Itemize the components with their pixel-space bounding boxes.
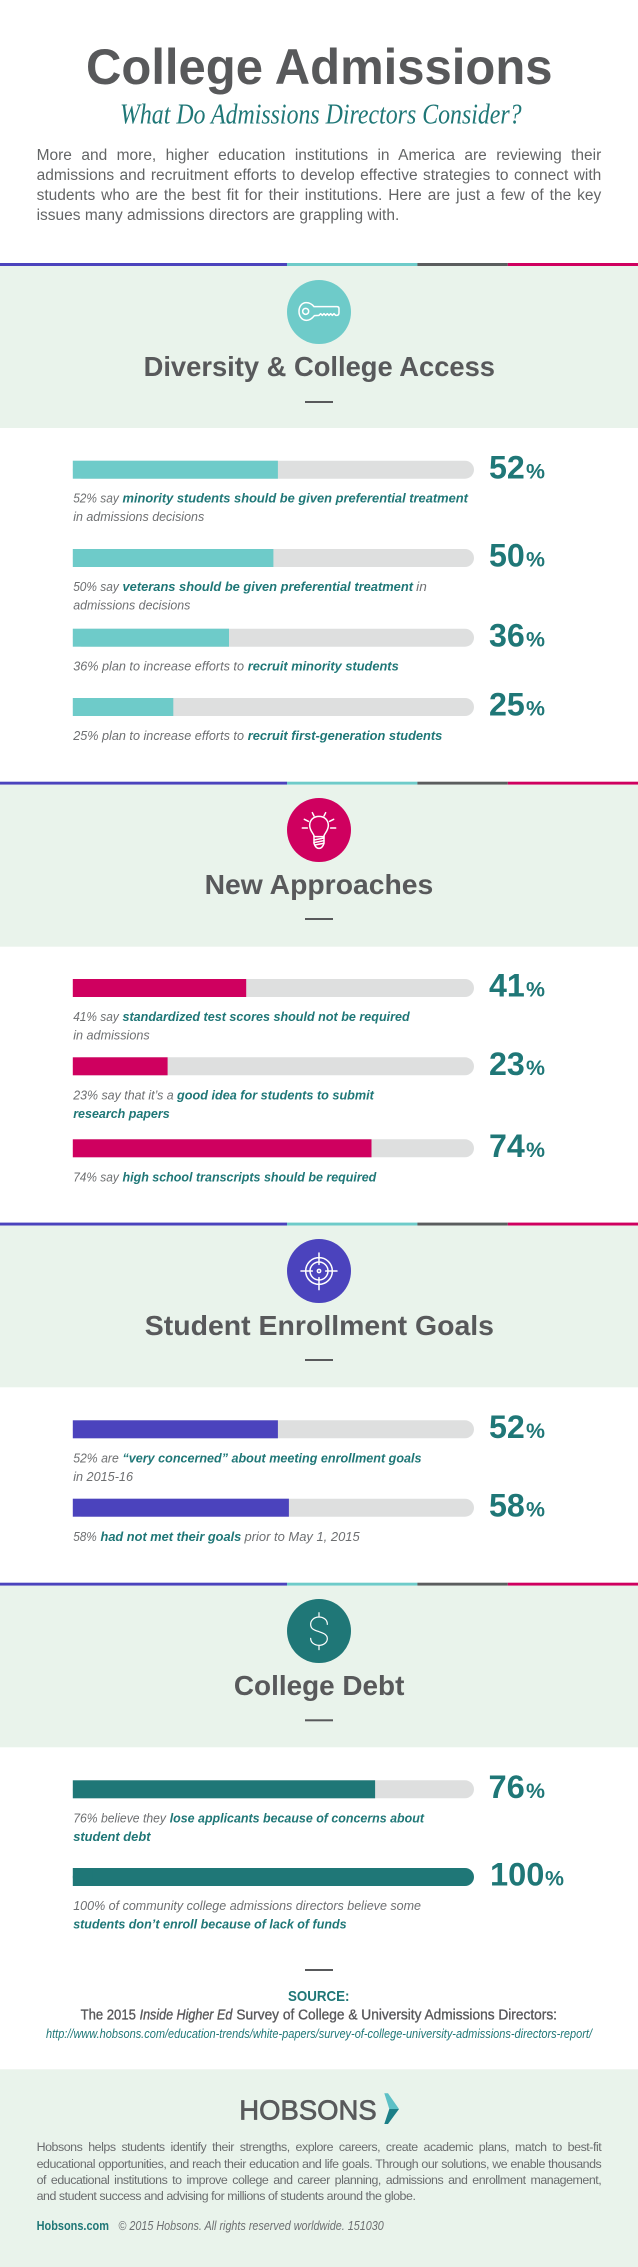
bar 50% veterans: admissions decisions xyxy=(73,597,191,612)
intro paragraph xyxy=(37,147,602,224)
bar 25% first-generation students: recruit first-generation students xyxy=(248,728,442,743)
footer links xyxy=(37,2218,384,2233)
bar 50% veterans: 50 xyxy=(489,537,525,573)
icon: key xyxy=(287,280,351,344)
bar 76% lose applicants: lose applicants because of concerns about xyxy=(170,1811,425,1826)
bar 52% very concerned xyxy=(73,1409,545,1484)
bar 36% recruit minority students xyxy=(73,617,545,674)
bar 23% research papers: 23 xyxy=(489,1046,525,1082)
stats: Student Enrollment Goals xyxy=(73,1409,545,1544)
bar 41% test scores xyxy=(73,968,545,1042)
bar 52% very concerned: % xyxy=(526,1420,545,1443)
bar 50% veterans: 50% say xyxy=(73,579,120,594)
panel: Student Enrollment Goals xyxy=(0,1226,638,1387)
bar 76% lose applicants: student debt xyxy=(73,1829,151,1844)
footer paragraph xyxy=(37,2140,602,2203)
icon: target xyxy=(287,1239,351,1303)
footer links: Hobsons.com xyxy=(37,2218,109,2233)
heading: Student Enrollment Goals xyxy=(145,1310,494,1341)
panel: Diversity & College Access xyxy=(0,266,638,428)
bar 100% lack of funds xyxy=(73,1857,564,1931)
source credit: SOURCE: xyxy=(288,1988,350,2005)
bar 41% test scores: 41% say xyxy=(73,1009,120,1024)
intro paragraph: issues many admissions directors are grappling with. xyxy=(37,207,399,224)
bar 52% very concerned: 52 xyxy=(489,1409,525,1445)
bar 52% very concerned: “very concerned” about meeting enrollment goals xyxy=(122,1451,422,1466)
bar 76% lose applicants xyxy=(73,1769,545,1844)
logo: Hobsons: HOBSONS xyxy=(239,2094,377,2125)
bar 52% minority students: 52 xyxy=(489,449,525,485)
intro paragraph: students who are the best fit for their institutions. Here are just a few of the key xyxy=(37,187,601,204)
bar 52% minority students: in admissions decisions xyxy=(73,509,205,524)
bar 41% test scores: in admissions xyxy=(73,1027,150,1042)
bar 58% goals not met: % xyxy=(526,1498,545,1521)
icon: light bulb xyxy=(287,798,351,862)
bar 52% minority students: minority students should be given preferential treatment xyxy=(122,491,469,506)
stats: College Debt xyxy=(73,1769,564,1931)
bar 52% minority students xyxy=(73,449,545,524)
footer paragraph: Hobsons helps students identify their strengths, explore careers, create academic plans, match to best-fit xyxy=(37,2140,601,2154)
bar 25% first-generation students: 25 xyxy=(489,687,525,723)
footer paragraph: and student success and advising for millions of students around the globe. xyxy=(37,2189,415,2203)
subtitle: What Do Admissions Directors Consider? xyxy=(120,98,522,130)
bar 74% transcripts xyxy=(73,1128,545,1185)
bar 25% first-generation students: % xyxy=(526,698,545,721)
bar 52% minority students: 52% say xyxy=(73,491,120,506)
footer paragraph: of educational institutions to improve college and career planning, admissions and enrollment management, xyxy=(37,2173,601,2187)
bar 50% veterans: veterans should be given preferential treatment xyxy=(122,579,414,594)
source credit: Survey of College & University Admissions Directors: xyxy=(236,2007,557,2023)
bar 58% goals not met: prior to May 1, 2015 xyxy=(244,1529,360,1544)
footer panel xyxy=(0,2069,638,2267)
bar 36% recruit minority students: % xyxy=(526,628,545,651)
source credit xyxy=(46,1988,593,2041)
bar 41% test scores: standardized test scores should not be required xyxy=(122,1009,411,1024)
bar 100% lack of funds: 100 xyxy=(490,1857,544,1893)
bar 50% veterans: in xyxy=(416,579,427,594)
bar 100% lack of funds: % xyxy=(545,1868,564,1891)
bar 76% lose applicants: 76 xyxy=(488,1769,525,1805)
bar 23% research papers: 23% say that it’s a xyxy=(72,1088,174,1103)
bar 58% goals not met: had not met their goals xyxy=(100,1529,241,1544)
source credit: The 2015 xyxy=(81,2007,136,2023)
bar 52% minority students: % xyxy=(526,460,545,483)
bar 23% research papers xyxy=(72,1046,545,1121)
heading: New Approaches xyxy=(205,869,433,900)
panel: New Approaches xyxy=(0,785,638,947)
bar 74% transcripts: high school transcripts should be required xyxy=(122,1170,377,1185)
source credit: Inside Higher Ed xyxy=(140,2007,233,2023)
bar 74% transcripts: % xyxy=(526,1139,545,1162)
stats: Diversity & College Access xyxy=(72,449,545,743)
intro paragraph: More and more, higher education institutions in America are reviewing their xyxy=(37,147,601,164)
bar 23% research papers: % xyxy=(526,1057,545,1080)
bar 50% veterans xyxy=(73,537,545,612)
footer links: © 2015 Hobsons. All rights reserved worldwide. 151030 xyxy=(118,2218,384,2233)
bar 41% test scores: % xyxy=(526,979,545,1002)
icon: dollar sign xyxy=(287,1599,351,1663)
bar 100% lack of funds: students don’t enroll because of lack of funds xyxy=(73,1916,347,1931)
bar 36% recruit minority students: 36 xyxy=(489,617,525,653)
bar 74% transcripts: 74 xyxy=(489,1128,525,1164)
bar 52% very concerned: in 2015-16 xyxy=(73,1469,134,1484)
heading: College Debt xyxy=(234,1670,404,1701)
bar 76% lose applicants: % xyxy=(526,1780,545,1803)
bar 52% very concerned: 52% are xyxy=(73,1451,119,1466)
bar 36% recruit minority students: recruit minority students xyxy=(248,659,399,674)
bar 100% lack of funds: 100% of community college admissions directors believe some xyxy=(73,1898,421,1913)
bar 58% goals not met: 58% xyxy=(73,1529,97,1544)
heading: Diversity & College Access xyxy=(144,351,495,382)
bar 25% first-generation students: 25% plan to increase efforts to xyxy=(72,728,244,743)
bar 23% research papers: research papers xyxy=(73,1106,170,1121)
bar 76% lose applicants: 76% believe they xyxy=(73,1811,167,1826)
bar 25% first-generation students xyxy=(72,687,545,743)
stats: New Approaches xyxy=(72,968,545,1185)
intro paragraph: admissions and recruitment efforts to develop effective strategies to connect with xyxy=(37,167,601,184)
bar 23% research papers: good idea for students to submit xyxy=(176,1088,375,1103)
bar 74% transcripts: 74% say xyxy=(73,1170,120,1185)
bar 58% goals not met: 58 xyxy=(489,1487,525,1523)
bar 41% test scores: 41 xyxy=(489,968,525,1004)
panel: College Debt xyxy=(0,1586,638,1747)
title: College Admissions xyxy=(86,39,552,95)
bar 50% veterans: % xyxy=(526,548,545,571)
bar 58% goals not met xyxy=(73,1487,545,1544)
footer paragraph: educational opportunities, and reach their education and life goals. Through our solutions, we enable thousands xyxy=(37,2157,601,2171)
bar 36% recruit minority students: 36% plan to increase efforts to xyxy=(73,659,244,674)
